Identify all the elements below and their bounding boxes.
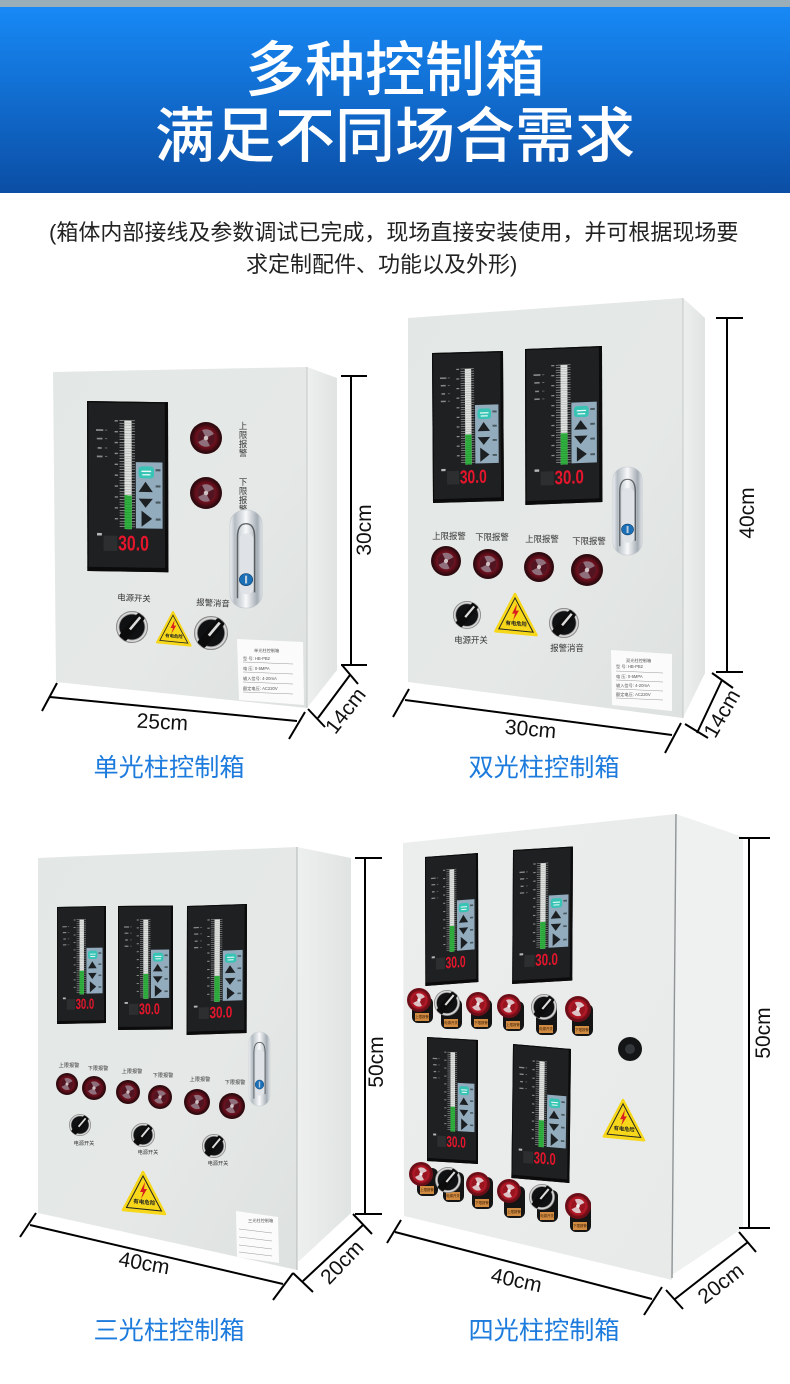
warning triangle: 有电危险 <box>613 1124 636 1134</box>
lamp labels: 上限报警 <box>432 531 466 541</box>
stickers upper row: 电源开关 <box>444 1020 458 1025</box>
depth dimension <box>293 1214 372 1292</box>
bar meter display <box>87 401 168 572</box>
width dimension <box>42 683 305 739</box>
selector switches <box>453 601 579 638</box>
depth dimension: 20cm <box>694 1259 748 1309</box>
height dimension <box>716 318 759 672</box>
bar meter display 1 <box>425 853 478 986</box>
lower control row <box>409 1162 591 1232</box>
height dimension: 30cm <box>353 504 376 556</box>
caption: 三光柱控制箱 <box>93 1317 245 1345</box>
header banner <box>0 7 790 193</box>
bar meter display 3: 30.0 <box>446 1134 466 1152</box>
bar meter display 4: 30.0 <box>534 1149 556 1169</box>
bar meter display 1: 30.0 <box>76 996 94 1012</box>
stickers upper row: 上限报警 <box>506 1022 520 1027</box>
lamps and switches upper row <box>407 988 591 1022</box>
depth dimension <box>308 665 371 738</box>
title: 满足不同场合需求 <box>155 88 635 175</box>
height dimension: 40cm <box>736 487 759 539</box>
lamp labels: 上限报警 <box>525 534 559 544</box>
bar meter display 1 <box>432 351 504 503</box>
depth dimension <box>685 673 745 742</box>
top grey strip <box>0 0 790 7</box>
caption: 四光柱控制箱 <box>468 1317 620 1345</box>
door lock handle <box>249 1032 270 1106</box>
bar meter display 2: 30.0 <box>555 466 584 489</box>
warning triangle <box>157 612 191 646</box>
depth dimension <box>666 1232 756 1309</box>
caption: 双光柱控制箱 <box>468 754 620 782</box>
width dimension: 40cm <box>489 1264 544 1297</box>
cabinet body <box>53 367 337 708</box>
lamp labels: 上限报警 <box>122 1067 142 1075</box>
depth dimension: 20cm <box>316 1236 368 1289</box>
lamp labels: 下限报警 <box>572 536 606 546</box>
bar meter display: 30.0 <box>118 532 149 556</box>
upper control row <box>407 988 593 1036</box>
switch labels <box>454 635 584 653</box>
cabinet body <box>403 814 743 1280</box>
bar meter display 2 <box>512 846 573 984</box>
switch labels: 电源开关 <box>117 592 152 604</box>
panel: triple column control box <box>20 847 388 1345</box>
width dimension: 30cm <box>504 716 557 743</box>
subtitle note: (箱体内部接线及参数调试已完成，现场直接安装使用，并可根据现场要 <box>49 220 738 245</box>
switch labels: 电源开关 <box>208 1159 228 1167</box>
subtitle note: 求定制配件、功能以及外形) <box>246 252 517 277</box>
height dimension: 50cm <box>365 1036 388 1088</box>
vertical lamp labels: 限 <box>239 430 248 440</box>
switch labels <box>117 592 230 609</box>
nameplate: 单光柱控制箱 <box>254 647 279 654</box>
stickers lower row: 下限报警 <box>475 1200 489 1205</box>
lamp labels: 下限报警 <box>475 532 509 542</box>
caption: 单光柱控制箱 <box>93 754 245 782</box>
lamps and switches lower row <box>409 1162 591 1219</box>
stickers lower row: 电源开关 <box>446 1193 460 1198</box>
stickers upper row: 电源开关 <box>539 1026 553 1031</box>
selector switches <box>116 611 228 650</box>
lamp labels: 下限报警 <box>225 1078 245 1086</box>
nameplate: 双光柱控制箱 <box>626 657 651 664</box>
nameplate: 额定电压: AC220V <box>616 691 651 698</box>
height dimension: 50cm <box>752 1007 775 1059</box>
width dimension <box>20 1213 293 1300</box>
vertical lamp labels: 报 <box>239 439 248 449</box>
nameplate: 型 号: HB-PB2 <box>243 655 271 662</box>
vertical lamp labels: 限 <box>239 486 248 496</box>
switch labels: 报警消音 <box>196 597 230 609</box>
door lock knob <box>618 1037 642 1061</box>
lamp labels <box>59 1061 245 1086</box>
width dimension: 25cm <box>136 710 189 735</box>
nameplate: 电 压: 0-5MPA <box>616 673 643 680</box>
warning triangle <box>604 1100 644 1140</box>
switch labels: 报警消音 <box>550 643 584 653</box>
nameplate <box>236 1211 279 1263</box>
bar meter display 4 <box>511 1044 571 1183</box>
nameplate: 输入信号: 4-20mA <box>616 682 650 689</box>
warning triangle <box>495 594 537 635</box>
bar meter display 1 <box>57 906 106 1024</box>
vertical lamp labels: 上 <box>239 421 247 431</box>
selector switches <box>69 1114 226 1158</box>
height dimension <box>739 838 775 1228</box>
nameplate: 三光柱控制箱 <box>248 1217 273 1224</box>
stickers lower row: 电源开关 <box>540 1213 554 1218</box>
bar meter display 2 <box>118 906 173 1030</box>
switch labels <box>74 1139 228 1167</box>
lamp labels: 下限报警 <box>153 1071 173 1079</box>
vertical lamp labels: 下 <box>239 477 247 487</box>
bar meter display 2: 30.0 <box>535 951 558 970</box>
depth dimension: 14cm <box>700 686 745 742</box>
warning triangle: 有电危险 <box>505 619 528 628</box>
warning triangle: 有电危险 <box>133 1197 156 1207</box>
alarm lamps <box>56 1073 245 1119</box>
depth dimension: 14cm <box>321 684 371 738</box>
stickers upper row: 下限报警 <box>474 1020 488 1025</box>
nameplate: 型 号: HB-PB2 <box>616 663 644 670</box>
width dimension <box>393 689 681 753</box>
bar meter display 3 <box>427 1037 478 1164</box>
title <box>155 22 635 175</box>
switch labels: 电源开关 <box>138 1148 158 1156</box>
vertical lamp labels: 报 <box>239 495 248 505</box>
cabinet body <box>408 298 705 718</box>
stickers lower row <box>417 1168 591 1232</box>
width dimension <box>387 1220 662 1315</box>
nameplate: 电 压: 0-5MPA <box>243 665 270 672</box>
stickers upper row: 下限报警 <box>575 1027 589 1032</box>
stickers upper row <box>412 997 593 1036</box>
nameplate <box>237 639 304 705</box>
vertical lamp labels <box>239 421 248 514</box>
alarm lamps <box>190 422 222 509</box>
lamp labels <box>432 531 606 546</box>
stickers upper row: 上限报警 <box>415 1014 429 1019</box>
bar meter display 2 <box>525 346 602 505</box>
bar meter display 2: 30.0 <box>139 1001 160 1019</box>
nameplate: 输入信号: 4-20mA <box>243 675 277 682</box>
height dimension <box>355 858 388 1214</box>
lamp labels: 上限报警 <box>190 1075 210 1083</box>
switch labels: 电源开关 <box>454 635 488 645</box>
door lock handle <box>613 467 642 555</box>
bar meter display 3 <box>187 904 247 1035</box>
nameplate <box>611 650 672 711</box>
stickers lower row: 上限报警 <box>420 1187 434 1192</box>
bar meter display 1: 30.0 <box>445 954 466 973</box>
nameplate: 额定电压: AC220V <box>243 685 278 692</box>
subtitle note <box>49 220 738 277</box>
warning triangle: 有电危险 <box>165 632 184 640</box>
title: 多种控制箱 <box>245 22 545 109</box>
height dimension <box>341 376 376 665</box>
panel: quad column control box <box>387 814 775 1345</box>
bar meter display 1: 30.0 <box>460 465 487 488</box>
width dimension: 40cm <box>117 1248 171 1279</box>
lamp labels: 上限报警 <box>59 1061 79 1069</box>
vertical lamp labels: 警 <box>239 448 248 458</box>
bar meter display 3: 30.0 <box>209 1004 233 1022</box>
switch labels: 电源开关 <box>74 1139 94 1147</box>
alarm lamps <box>431 546 603 586</box>
vertical lamp labels: 警 <box>239 504 248 514</box>
stickers lower row: 上限报警 <box>507 1209 521 1214</box>
cabinet body <box>38 847 351 1270</box>
door lock handle <box>230 510 262 608</box>
stickers lower row: 下限报警 <box>573 1223 587 1228</box>
lamp labels: 下限报警 <box>88 1064 108 1072</box>
panel: double column control box <box>393 298 759 782</box>
warning triangle <box>123 1172 165 1214</box>
panel: single column control box <box>42 367 376 782</box>
